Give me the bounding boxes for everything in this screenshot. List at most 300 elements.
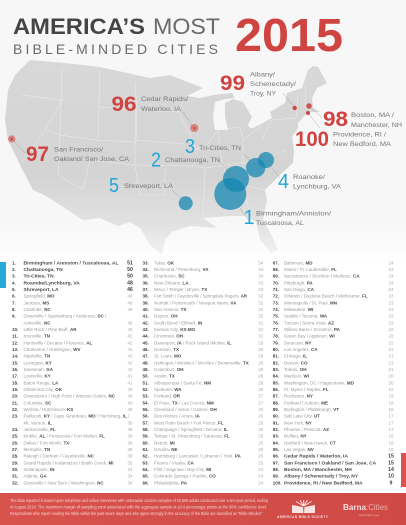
label: 96 Cedar Rapids: Cedar Rapids/ bbox=[141, 96, 188, 103]
ranking column 2: Columbus, OH bbox=[154, 367, 184, 372]
ranking column 3: 85. bbox=[273, 380, 279, 385]
label: 3 Tri-Cities bbox=[185, 136, 241, 158]
ranking column 2: Tampa / St. Petersburg / Sarasota, FL bbox=[154, 434, 230, 439]
ranking column 2: 49. bbox=[142, 367, 149, 372]
ranking column 1: Memphis, TN bbox=[24, 447, 50, 452]
ranking column 2: West Palm Beach / Fort Pierce, FL bbox=[154, 420, 224, 425]
ranking column 2: 26 bbox=[258, 427, 264, 432]
ranking column 3: 67. bbox=[273, 260, 279, 265]
ranking column 2: Harlingen / Weslaco / McAllen / Brownsville, TX bbox=[154, 360, 249, 365]
ranking column 2: Houston, TX bbox=[154, 347, 179, 352]
ranking column 3: Miami / Ft. Lauderdale, FL bbox=[284, 267, 337, 272]
ranking column 2: Spokane, WA bbox=[154, 387, 182, 392]
ranking column 1: Lexington, KY bbox=[24, 360, 52, 365]
ranking column 2: 39. bbox=[142, 300, 149, 305]
ranking column 1: Greensboro / High Point / Winston-Salem, NC bbox=[24, 394, 116, 399]
ranking column 2: Portland, OR bbox=[154, 394, 181, 399]
ranking column 1: 46 bbox=[127, 300, 133, 305]
ranking column 2: 34 bbox=[258, 274, 264, 279]
label: 4 Roanoke: 4 bbox=[278, 171, 289, 193]
ranking column 3: 22 bbox=[388, 327, 394, 332]
ranking column 3: 19 bbox=[388, 394, 394, 399]
ranking column 3: Minneapolis / St. Paul, MN bbox=[284, 300, 337, 305]
ranking column 1: 46 bbox=[127, 287, 133, 293]
ranking column 1: 29. bbox=[12, 460, 18, 465]
ranking column 1: 22. bbox=[12, 407, 18, 412]
ranking column 2: Colorado Springs / Pueblo, CO bbox=[154, 474, 216, 479]
ranking column 3: 22 bbox=[388, 314, 394, 319]
label: 100 Providence: New Bedford, MA bbox=[333, 141, 392, 148]
ranking column 3: Baltimore, MD bbox=[284, 260, 313, 265]
ranking column 2: 59. bbox=[142, 434, 149, 439]
ranking column 3: 22 bbox=[388, 320, 394, 325]
ranking column 1: 11. bbox=[12, 334, 18, 339]
ranking column 3: 96. bbox=[273, 454, 279, 459]
ranking column 1: Shreveport, LA bbox=[24, 287, 59, 293]
top five marker bbox=[0, 262, 6, 288]
ranking column 2: 33 bbox=[258, 280, 264, 285]
label: 96 Cedar Rapids: 96 bbox=[112, 93, 136, 116]
ranking column 3: 20 bbox=[388, 380, 394, 385]
ranking column 1: 9. bbox=[12, 314, 16, 319]
ranking column 3: 15 bbox=[388, 454, 394, 460]
ranking column 2: 44. bbox=[142, 334, 149, 339]
ranking column 1: Jackson, MS bbox=[24, 300, 49, 305]
ranking column 3: 74. bbox=[273, 307, 279, 312]
ranking column 3: 22 bbox=[388, 334, 394, 339]
ranking column 2: Richmond / Petersburg, VA bbox=[154, 267, 209, 272]
ranking column 2: 41. bbox=[142, 314, 149, 319]
label: 97 San Francisco bbox=[26, 143, 129, 166]
ranking column 2: 42. bbox=[142, 320, 149, 325]
ranking column 3: 71. bbox=[273, 287, 279, 292]
label: 99 Albany: Troy, NY bbox=[250, 90, 276, 98]
ranking column 1: Asheville, NC bbox=[24, 320, 51, 325]
ranking column 1: Mt. Vernon, IL bbox=[24, 420, 52, 425]
Barna Cities logo: :Cities bbox=[366, 503, 388, 512]
ranking column 3: 86. bbox=[273, 387, 279, 392]
ranking column 3: Buffalo, NY bbox=[284, 434, 307, 439]
ranking column 1: Wichita / Hutchinson, KS bbox=[24, 407, 73, 412]
ranking column 3: 24 bbox=[388, 260, 394, 265]
ranking column 3: San Diego, CA bbox=[284, 287, 315, 292]
ranking column 3: 97. bbox=[273, 460, 279, 465]
ranking column 2: Dayton, OH bbox=[154, 314, 178, 319]
ranking column 3: 73. bbox=[273, 300, 279, 305]
ranking column 3: 100. bbox=[273, 480, 281, 485]
ranking column 3: 88. bbox=[273, 400, 279, 405]
footer methodology text: in August 2014. The maximum margin of sampling error associated with the aggregate sample is ±0.4 percentage points at the 95% confidence level. bbox=[10, 504, 267, 510]
title: MOST bbox=[153, 14, 220, 39]
ranking column 3: 89. bbox=[273, 407, 279, 412]
ranking column 2: 25 bbox=[258, 447, 264, 452]
ranking column 1: 31. bbox=[12, 474, 18, 479]
ranking column 3: 18 bbox=[388, 400, 394, 405]
ranking column 1: 38 bbox=[127, 434, 133, 439]
label: 1 Birmingham: Birmingham/Anniston/ bbox=[256, 210, 331, 218]
ranking column 3: Los Angeles, CA bbox=[284, 347, 318, 352]
ranking column 1: 42 bbox=[127, 347, 133, 352]
ranking column 1: 42 bbox=[127, 354, 133, 359]
ranking column 1: Huntsville / Decatur / Florence, AL bbox=[24, 340, 93, 345]
ranking column 3: Wilkes-Barre / Scranton, PA bbox=[284, 327, 341, 332]
ranking column 1: 42 bbox=[127, 360, 133, 365]
ranking column 3: 77. bbox=[273, 327, 279, 332]
ranking column 1: 4. bbox=[12, 280, 16, 285]
label: 4 Roanoke: Lynchburg, VA bbox=[293, 184, 342, 190]
ranking column 2: 50. bbox=[142, 374, 149, 379]
ranking column 3: 72. bbox=[273, 294, 279, 299]
ranking column 1: 40 bbox=[127, 387, 133, 392]
ranking column 1: Jacksonville, FL bbox=[24, 427, 56, 432]
ranking column 1: 28. bbox=[12, 454, 18, 459]
ranking column 3: 79. bbox=[273, 340, 279, 345]
ranking column 2: 26 bbox=[258, 420, 264, 425]
footer band bbox=[0, 493, 406, 525]
label: 2 Chattanooga bbox=[151, 150, 220, 172]
ranking column 2: 34. bbox=[142, 267, 149, 272]
ranking column 1: Birmingham / Anniston / Tuscaloosa, AL bbox=[24, 260, 118, 266]
ranking column 1: 46 bbox=[127, 320, 133, 325]
label: 4 Roanoke bbox=[278, 171, 342, 193]
ranking column 3: Burlington / Plattsburgh, VT bbox=[284, 407, 339, 412]
bottom five marker bbox=[401, 453, 406, 487]
ranking column 3: 93. bbox=[273, 434, 279, 439]
ranking column 2: 62. bbox=[142, 454, 149, 459]
ranking column 3: 91. bbox=[273, 420, 279, 425]
ranking column 1: 38 bbox=[127, 440, 133, 445]
ranking column 2: 38. bbox=[142, 294, 149, 299]
Barna Cities logo bbox=[343, 503, 388, 517]
ranking column 3: 92. bbox=[273, 427, 279, 432]
ranking column 1: Oklahoma City, OK bbox=[24, 387, 63, 392]
ranking column 1: Greenville / New Bern / Washington, NC bbox=[24, 480, 104, 485]
ranking column 2: 58. bbox=[142, 427, 149, 432]
ranking column 1: 25. bbox=[12, 434, 18, 439]
ranking column 2: 52. bbox=[142, 387, 149, 392]
ranking column 1: Charleston / Huntington, WV bbox=[24, 347, 81, 352]
ranking column 3: 24 bbox=[388, 274, 394, 279]
ranking column 3: Albany / Schenectady / Troy, NY bbox=[284, 474, 359, 480]
ranking column 1: 48 bbox=[127, 280, 133, 286]
ranking column 2: 64. bbox=[142, 467, 149, 472]
ranking column 2: Cleveland / Akron / Canton, OH bbox=[154, 407, 217, 412]
ranking column 3: 24 bbox=[388, 287, 394, 292]
ranking column 3: 21 bbox=[388, 354, 394, 359]
label: 96 Cedar Rapids: Waterloo, IA bbox=[141, 106, 181, 113]
ranking column 1: Paducah, KY / Cape Girardeau, MO / Harrisburg, IL / bbox=[24, 414, 130, 419]
ranking column 3: 69. bbox=[273, 274, 279, 279]
ranking column 1: 7. bbox=[12, 300, 16, 305]
title: BIBLE-MINDED CITIES bbox=[13, 41, 218, 57]
ranking column 2: Harrisburg / Lancaster / Lebanon / York, PA bbox=[154, 454, 241, 459]
ranking column 3: 95. bbox=[273, 447, 279, 452]
label: 1 Birmingham: Tuscaloosa, AL bbox=[256, 220, 304, 227]
ranking column 3: Tucson / Sierra Vista, AZ bbox=[284, 320, 334, 325]
ranking column 3: 21 bbox=[388, 367, 394, 372]
label: 99 Albany bbox=[220, 72, 296, 98]
ranking column 3: 9 bbox=[390, 480, 393, 486]
ranking column 2: 28 bbox=[258, 367, 264, 372]
ranking column 2: 29 bbox=[258, 340, 264, 345]
ranking column 1: 23. bbox=[12, 414, 18, 419]
ranking column 1: Indianapolis, IN bbox=[24, 467, 55, 472]
ranking column 1: Roanoke/Lynchburg, VA bbox=[24, 280, 80, 286]
ranking column 2: El Paso, TX / Las Cruces, NM bbox=[154, 400, 214, 405]
ranking column 3 bbox=[273, 260, 394, 486]
year 2015: 2015 bbox=[235, 9, 343, 61]
label: 99 Albany: Albany/ bbox=[250, 72, 275, 78]
ranking column 3: Hartford / New Haven, CT bbox=[284, 440, 336, 445]
ranking column 2: Des Moines / Ames, IA bbox=[154, 414, 201, 419]
ranking column 2: 28 bbox=[258, 387, 264, 392]
ranking column 3: Ft. Myers / Naples, FL bbox=[284, 387, 329, 392]
label: 97 San Francisco: San Francisco/ bbox=[54, 146, 103, 154]
ranking column 3: Boston, MA / Manchester, NH bbox=[284, 467, 352, 473]
ranking column 2: 51. bbox=[142, 380, 149, 385]
ranking column 2: 29 bbox=[258, 347, 264, 352]
label: 99 Albany: Schenectady/ bbox=[250, 81, 296, 88]
ranking column 3: 22 bbox=[388, 340, 394, 345]
label: 98 Boston bbox=[323, 108, 402, 131]
ranking column 2: Champaign / Springfield / Decatur, IL bbox=[154, 427, 228, 432]
ranking column 2: 25 bbox=[258, 460, 264, 465]
ranking column 3: Madison, WI bbox=[284, 374, 309, 379]
ranking column 1: Greenville / Spartanburg / Anderson, SC / bbox=[24, 314, 107, 319]
ranking column 1: 18. bbox=[12, 380, 18, 385]
Barna Cities logo: Barna bbox=[343, 503, 366, 512]
ranking column 3: 81. bbox=[273, 354, 279, 359]
ranking column 2: 61. bbox=[142, 447, 149, 452]
ranking column 2: 28 bbox=[258, 374, 264, 379]
label: 3 Tri-Cities: 3 bbox=[185, 136, 195, 158]
ranking column 2 bbox=[142, 260, 264, 485]
label: 97 San Francisco: 97 bbox=[26, 143, 49, 166]
ranking column 3: 21 bbox=[388, 347, 394, 352]
label: 4 Roanoke: Roanoke/ bbox=[293, 174, 325, 181]
ranking column 1: 24. bbox=[12, 427, 18, 432]
ranking column 2: South Bend / Elkhart, IN bbox=[154, 320, 202, 325]
Barna Cities logo: www.barna.org bbox=[359, 513, 379, 517]
ranking column 3: 17 bbox=[388, 420, 394, 425]
ranking column 3: 24 bbox=[388, 280, 394, 285]
ranking column 1: 39 bbox=[127, 407, 133, 412]
ranking column 3: 16 bbox=[388, 440, 394, 445]
ranking column 1: 15. bbox=[12, 360, 18, 365]
ranking column 3: Orlando / Daytona Beach / Melbourne, FL bbox=[284, 294, 368, 299]
ranking column 1: Savannah, GA bbox=[24, 367, 54, 372]
ranking column 2: 34 bbox=[258, 267, 264, 272]
ranking column 3: Milwaukee, WI bbox=[284, 307, 313, 312]
ranking column 2: 25 bbox=[258, 440, 264, 445]
ranking column 3: 99. bbox=[273, 474, 279, 479]
ranking column 1: 32. bbox=[12, 480, 18, 485]
ranking column 2: Davenport, IA / Rock Island /Moline, IL bbox=[154, 340, 232, 345]
footer methodology text: Respondents who report reading the Bible within the past seven days and who agree strongly in the accuracy of the Bible are classified as "Bible Minded." bbox=[10, 511, 263, 516]
ranking column 1: 6. bbox=[12, 294, 16, 299]
ranking column 2: 48. bbox=[142, 360, 149, 365]
label: 100 Providence bbox=[295, 128, 392, 151]
ranking column 2: 32 bbox=[258, 314, 264, 319]
ranking column 2: 57. bbox=[142, 420, 149, 425]
ranking column 3: 78. bbox=[273, 334, 279, 339]
ranking column 2: 43. bbox=[142, 327, 149, 332]
ranking column 3: Seattle / Tacoma, WA bbox=[284, 314, 328, 319]
ranking column 2: Cincinnati, OH bbox=[154, 334, 183, 339]
ranking column 1: 5. bbox=[12, 287, 16, 292]
ranking column 2: 33 bbox=[258, 287, 264, 292]
footer methodology text bbox=[10, 498, 269, 516]
ranking column 2: 63. bbox=[142, 460, 149, 465]
ranking column 2: Norfolk / Portsmouth / Newport News, VA bbox=[154, 300, 237, 305]
ranking column 1: 42 bbox=[127, 340, 133, 345]
ranking column 3: Toledo, OH bbox=[284, 367, 307, 372]
ranking column 1: 51 bbox=[127, 260, 133, 266]
ranking column 2: 32 bbox=[258, 300, 264, 305]
ranking column 1: 1. bbox=[12, 260, 16, 265]
ranking column 3: Phoenix / Prescott, AZ bbox=[284, 427, 329, 432]
ranking column 1: Grand Rapids / Kalamazoo / Battle Creek, MI bbox=[24, 460, 114, 465]
ranking column 3: 98. bbox=[273, 467, 279, 472]
ranking column 2: 31 bbox=[258, 327, 264, 332]
ranking column 1: 17. bbox=[12, 374, 18, 379]
ranking column 2: 60. bbox=[142, 440, 149, 445]
ranking column 1: 50 bbox=[127, 274, 133, 280]
ranking column 2: 53. bbox=[142, 394, 149, 399]
ranking column 1: 38 bbox=[127, 447, 133, 452]
ranking column 2: 29 bbox=[258, 354, 264, 359]
ranking column 3: 75. bbox=[273, 314, 279, 319]
ranking column 1: Louisville, KY bbox=[24, 374, 51, 379]
ranking column 1: 40 bbox=[127, 400, 133, 405]
ranking column 3: 17 bbox=[388, 427, 394, 432]
ranking column 3: 68. bbox=[273, 267, 279, 272]
ranking column 1: 12. bbox=[12, 340, 18, 345]
title bbox=[13, 14, 220, 57]
label: 100 Providence: 100 bbox=[295, 128, 329, 151]
ranking column 2: St. Louis, MO bbox=[154, 354, 182, 359]
ranking column 1: 42 bbox=[127, 334, 133, 339]
label: 98 Boston: Boston, MA / bbox=[351, 112, 394, 119]
ranking column 2: 27 bbox=[258, 400, 264, 405]
ranking column 1: 30. bbox=[12, 467, 18, 472]
ranking column 2: Charleston, SC bbox=[154, 274, 185, 279]
ranking column 2: 24 bbox=[258, 467, 264, 472]
ranking column 2: Fort Smith / Fayetteville / Springdale-Rogers, AR bbox=[154, 294, 248, 299]
ranking column 2: 32 bbox=[258, 307, 264, 312]
ranking column 2: 46. bbox=[142, 347, 149, 352]
ranking column 2: 56. bbox=[142, 414, 149, 419]
leader lines bbox=[12, 93, 322, 225]
ranking column 1: Dallas / Fort Worth, TX bbox=[24, 440, 69, 445]
ranking column 2: Austin, TX bbox=[154, 374, 175, 379]
ranking column 3: Providence, RI / New Bedford, MA bbox=[284, 480, 363, 486]
ranking column 3: 90. bbox=[273, 414, 279, 419]
ranking column 2: 31 bbox=[258, 334, 264, 339]
ranking column 1: Columbia, SC bbox=[24, 400, 52, 405]
ranking column 2: 24 bbox=[258, 474, 264, 479]
ranking column 3: Denver, CO bbox=[284, 360, 308, 365]
footer methodology text: The data reported is based upon telephone and online interviews with nationwide random samples of 62,896 adults conducted over a ten-year period, ending bbox=[10, 498, 269, 503]
ranking column 3: 70. bbox=[273, 280, 279, 285]
ranking column 1: 35 bbox=[127, 460, 133, 465]
ranking column 3: 23 bbox=[388, 294, 394, 299]
ranking column 2: 25 bbox=[258, 454, 264, 459]
ranking column 1: 27. bbox=[12, 447, 18, 452]
ranking column 1: 2. bbox=[12, 267, 16, 272]
ranking column 2: Philadelphia, PA bbox=[154, 480, 188, 485]
ranking column 1: 34 bbox=[127, 480, 133, 485]
ranking column 2: 26 bbox=[258, 414, 264, 419]
red city markers bbox=[8, 103, 312, 143]
ranking column 1: Springfield, MO bbox=[24, 294, 55, 299]
ranking column 3: 24 bbox=[388, 267, 394, 272]
ranking column 3: 20 bbox=[388, 374, 394, 379]
ranking column 3: New York, NY bbox=[284, 420, 312, 425]
ranking column 1 bbox=[12, 260, 133, 485]
ranking column 2: 40. bbox=[142, 307, 149, 312]
ranking column 3: Pittsburgh, PA bbox=[284, 280, 313, 285]
ranking column 1: Knoxville, TN bbox=[24, 334, 50, 339]
ranking column 2: Fresno / Visalia, CA bbox=[154, 460, 195, 465]
ranking column 3: Salt Lake City, UT bbox=[284, 414, 320, 419]
ranking column 2: 45. bbox=[142, 340, 149, 345]
ranking column 1: 46 bbox=[127, 294, 133, 299]
ranking column 3: 23 bbox=[388, 300, 394, 305]
ranking column 2: San Antonio, TX bbox=[154, 307, 187, 312]
blue bubbles bbox=[179, 152, 274, 210]
ranking column 3: San Francisco / Oakland / San Jose, CA bbox=[284, 460, 377, 466]
ranking column 3: Chicago, IL bbox=[284, 354, 307, 359]
label: 100 Providence: Providence, RI / bbox=[333, 132, 386, 138]
label: 2 Chattanooga: 2 bbox=[151, 150, 161, 172]
ranking column 3: Syracuse, NY bbox=[284, 340, 312, 345]
label: 97 San Francisco: Oakland/ San Jose, CA bbox=[54, 156, 129, 163]
ranking column 1: 16. bbox=[12, 367, 18, 372]
ranking column 2: 37. bbox=[142, 287, 149, 292]
ranking column 2: New Orleans, LA bbox=[154, 280, 189, 285]
ranking column 3: 83. bbox=[273, 367, 279, 372]
ranking column 1: 8. bbox=[12, 307, 16, 312]
label: 5 Shreveport: Shreveport, LA bbox=[124, 183, 173, 190]
ranking column 1: 19. bbox=[12, 387, 18, 392]
ranking column 3: 21 bbox=[388, 360, 394, 365]
ranking column 3: 18 bbox=[388, 407, 394, 412]
ranking column 2: 26 bbox=[258, 434, 264, 439]
ranking column 2: 28 bbox=[258, 360, 264, 365]
ranking column 2: 47. bbox=[142, 354, 149, 359]
ranking column 1: 13. bbox=[12, 347, 18, 352]
ranking column 1: 40 bbox=[127, 394, 133, 399]
ranking column 2: 28 bbox=[258, 380, 264, 385]
ranking column 2: 26 bbox=[258, 407, 264, 412]
ranking column 2: 35. bbox=[142, 274, 149, 279]
ranking column 1: 21. bbox=[12, 400, 18, 405]
ranking column 2: Flint / Saginaw / Bay City, MI bbox=[154, 467, 211, 472]
ranking column 1: 41 bbox=[127, 380, 133, 385]
ranking column 3: 94. bbox=[273, 440, 279, 445]
ranking column 3: Green Bay / Appleton, WI bbox=[284, 334, 335, 339]
label: 3 Tri-Cities: Tri-Cities, TN bbox=[199, 145, 241, 152]
ranking column 3: 82. bbox=[273, 360, 279, 365]
ranking column 2: 55. bbox=[142, 407, 149, 412]
ranking column 3: Las Vegas, NV bbox=[284, 447, 314, 452]
ranking column 1: 46 bbox=[127, 327, 133, 332]
ranking column 3: 17 bbox=[388, 414, 394, 419]
ranking column 3: 15 bbox=[388, 447, 394, 452]
ranking column 1: Little Rock / Pine Bluff, AR bbox=[24, 327, 77, 332]
ranking column 3: 15 bbox=[388, 460, 394, 466]
